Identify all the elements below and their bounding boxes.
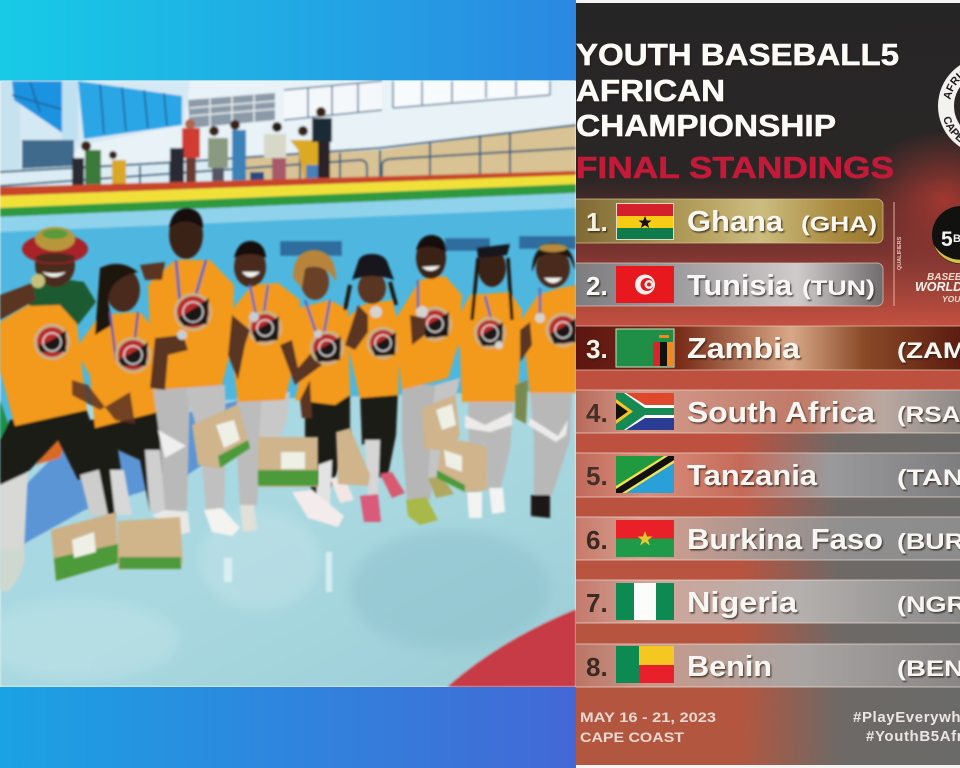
logo: championship seal xyxy=(938,65,960,147)
row 2: Tunisia xyxy=(570,263,883,306)
poster background xyxy=(576,0,960,768)
flag: Benin xyxy=(616,646,674,683)
row 8: Benin: (BEN) xyxy=(897,656,960,681)
player 5 xyxy=(280,250,354,527)
footer: date and venue: CAPE COAST xyxy=(580,729,684,745)
row 6: Burkina Faso xyxy=(570,517,960,560)
row 5: Tanzania xyxy=(570,453,960,497)
player 2 xyxy=(72,264,166,515)
heading: championship title: YOUTH BASEBALL5 xyxy=(576,37,899,72)
row 8: Benin xyxy=(570,644,960,687)
row 7: Nigeria xyxy=(570,580,960,623)
row 1: Ghana: 1. xyxy=(586,207,608,237)
row 1: Ghana: (GHA) xyxy=(801,213,877,236)
top gradient banner xyxy=(0,0,576,81)
row 6: Burkina Faso: 6. xyxy=(586,525,608,555)
flag: Nigeria xyxy=(616,583,674,620)
bag on floor right xyxy=(118,517,183,570)
footer: hashtags xyxy=(853,709,960,745)
railing xyxy=(0,125,576,186)
footer: date and venue xyxy=(580,709,716,745)
heading: championship title: AFRICAN xyxy=(576,73,725,108)
row 5: Tanzania: (TAN) xyxy=(897,465,960,490)
panel: final standings poster xyxy=(576,0,960,768)
floor shading xyxy=(350,530,550,650)
bag held by player 8 xyxy=(437,440,487,492)
row 8: Benin: 8. xyxy=(586,652,608,682)
spectators on balcony xyxy=(72,107,332,188)
row 5: Tanzania: Tanzania xyxy=(687,460,818,492)
bag on floor left xyxy=(51,512,118,581)
player 8 xyxy=(452,244,522,518)
rainbow balcony stripe xyxy=(0,171,576,217)
bag held by player 7 xyxy=(422,395,460,450)
flag: Burkina Faso xyxy=(616,520,674,557)
row 3: Zambia: (ZAM) xyxy=(897,338,960,363)
bag held by player 6 xyxy=(336,428,370,486)
row 7: Nigeria: Nigeria xyxy=(687,587,798,619)
footer: date and venue: MAY 16 - 21, 2023 xyxy=(580,709,716,725)
row 8: Benin: Benin xyxy=(687,651,772,683)
row 4: South Africa: South Africa xyxy=(687,397,876,429)
logo: world cup qualifier badge: QUALIFIERS xyxy=(897,236,903,270)
player 9 xyxy=(515,243,580,518)
red court marking xyxy=(447,609,576,687)
flag: Zambia xyxy=(616,329,674,367)
heading: championship title: CHAMPIONSHIP xyxy=(576,108,836,143)
flag: Tunisia xyxy=(616,266,674,303)
bottom gradient banner xyxy=(0,687,576,768)
row 7: Nigeria: 7. xyxy=(586,588,608,618)
player 7 xyxy=(395,235,462,525)
bag held by player 5 xyxy=(258,437,318,487)
logo: world cup qualifier badge xyxy=(894,202,960,306)
player 4 xyxy=(228,241,300,532)
row 7: Nigeria: (NGR) xyxy=(897,592,960,617)
row 4: South Africa: (RSA) xyxy=(897,402,960,427)
lower wall xyxy=(0,193,576,480)
gift bags xyxy=(51,395,487,581)
row 2: Tunisia: Tunisia xyxy=(687,270,793,302)
subheading: final standings: FINAL STANDINGS xyxy=(576,150,894,185)
flag: Ghana xyxy=(616,203,674,240)
row 2: Tunisia: (TUN) xyxy=(802,277,875,300)
row 2: Tunisia: 2. xyxy=(586,271,608,301)
row 3: Zambia: Zambia xyxy=(687,333,801,365)
player 3 xyxy=(140,208,240,536)
player 6 xyxy=(345,254,405,522)
bag held by player 3 xyxy=(192,404,250,468)
row 3: Zambia xyxy=(570,326,960,370)
row 1: Ghana: Ghana xyxy=(687,206,784,238)
heading: championship title xyxy=(576,44,900,138)
row 4: South Africa: 4. xyxy=(586,398,608,428)
logo: world cup qualifier badge: 5 xyxy=(941,228,953,251)
floor xyxy=(0,390,576,687)
team of nine players xyxy=(0,208,580,592)
row 3: Zambia: 3. xyxy=(586,334,608,364)
photo background: hall interior xyxy=(0,80,576,687)
flag: Tanzania xyxy=(616,456,674,493)
row 4: South Africa xyxy=(570,390,960,433)
row 5: Tanzania: 5. xyxy=(586,461,608,491)
panel: team photo xyxy=(0,80,580,687)
player 1 xyxy=(0,227,108,592)
row 1: Ghana xyxy=(570,199,883,243)
row 6: Burkina Faso: (BUR) xyxy=(897,529,960,554)
row 6: Burkina Faso: Burkina Faso xyxy=(687,524,883,556)
flag: South Africa xyxy=(616,393,674,430)
